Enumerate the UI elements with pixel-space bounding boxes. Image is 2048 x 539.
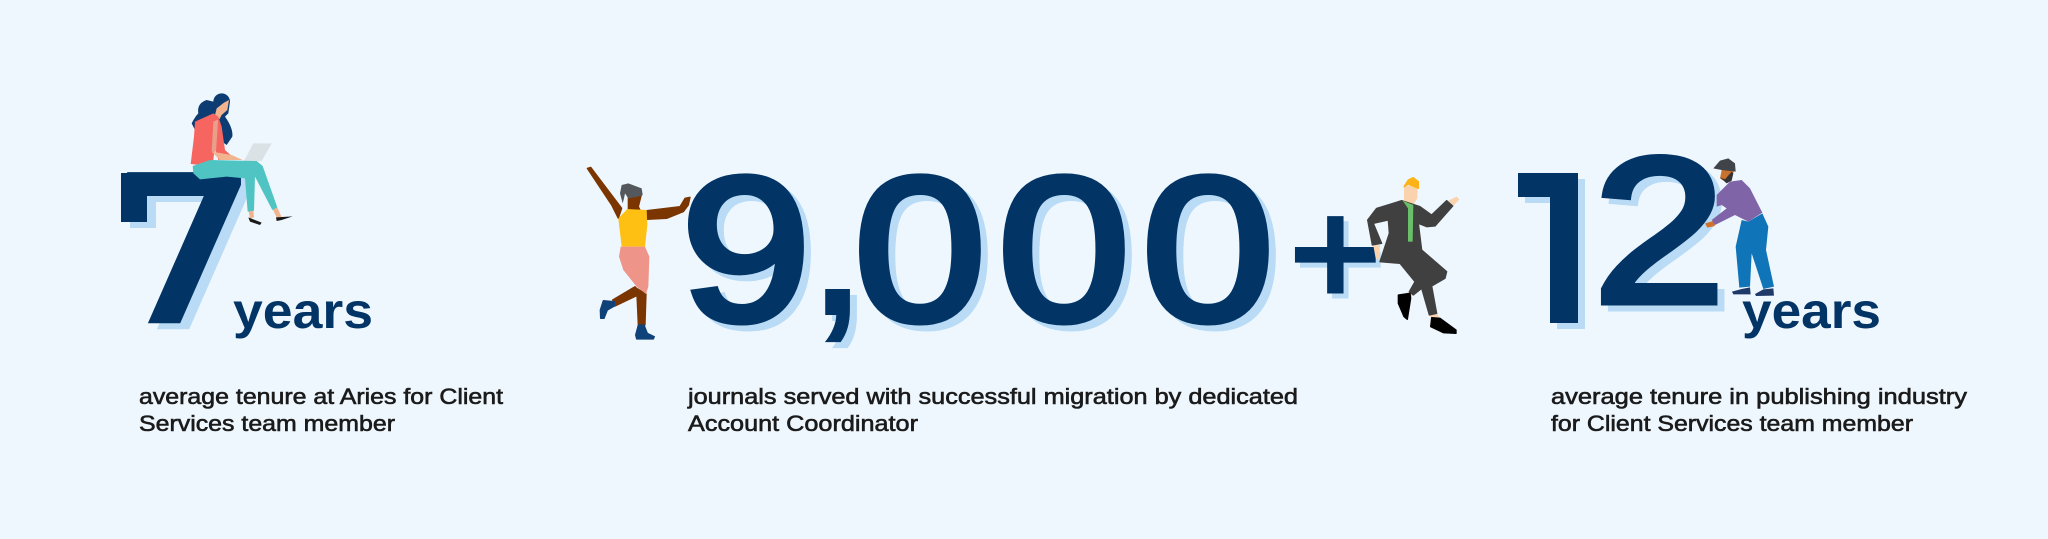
number: 9,000+: + [1290, 171, 1381, 336]
number: 9,000+: 0 [998, 135, 1130, 364]
illustration: woman with laptop sitting on the 7 [191, 93, 293, 225]
illustration: man in suit leaning on the plus [1368, 178, 1459, 333]
panel: 9,000+ journals served [587, 134, 1459, 436]
number: 7: 7 [113, 137, 256, 366]
number: 9,000+: 0 [1142, 135, 1274, 364]
number: 9,000+ [681, 134, 1386, 370]
caption: average tenure in publishing industry [1551, 384, 1967, 409]
label: years: years [233, 283, 373, 339]
caption: Services team member [139, 411, 395, 436]
number: 9,000+: 9 [681, 134, 811, 364]
caption: for Client Services team member [1551, 411, 1913, 436]
number: 12: 1 [1465, 127, 1665, 379]
number: 12 [1518, 154, 1724, 329]
caption: journals served with successful migration by dedicated [687, 384, 1298, 409]
number: 7: 7 [122, 143, 265, 372]
number: 12: 2 [1600, 121, 1732, 353]
number: 12: 1 [1458, 121, 1658, 373]
number: 12: 2 [1593, 115, 1725, 347]
number: 9,000+: + [1295, 176, 1386, 341]
number: 9,000+: 0 [1149, 141, 1281, 370]
caption [687, 384, 1298, 436]
number: 9,000+: 9 [688, 140, 818, 370]
caption [1551, 384, 1967, 436]
number: 9,000+: 0 [1005, 141, 1137, 370]
panel: 7 years tenure at Aries [113, 93, 503, 436]
caption [139, 384, 503, 436]
number: 9,000+: , [820, 164, 869, 359]
number: 9,000+: 0 [854, 135, 986, 364]
illustration: man pushing the 2 [1705, 158, 1774, 296]
infographic canvas [121, 93, 1968, 432]
number: 9,000+: 0 [861, 141, 993, 370]
panel: 12 years in publishing industry [1518, 154, 1968, 432]
caption: average tenure at Aries for Client [139, 384, 503, 409]
label: years: years [1742, 283, 1881, 339]
illustration: dancing woman leaning on the 9 [587, 167, 690, 339]
caption: Account Coordinator [688, 411, 918, 436]
number: 9,000+: , [813, 158, 862, 353]
